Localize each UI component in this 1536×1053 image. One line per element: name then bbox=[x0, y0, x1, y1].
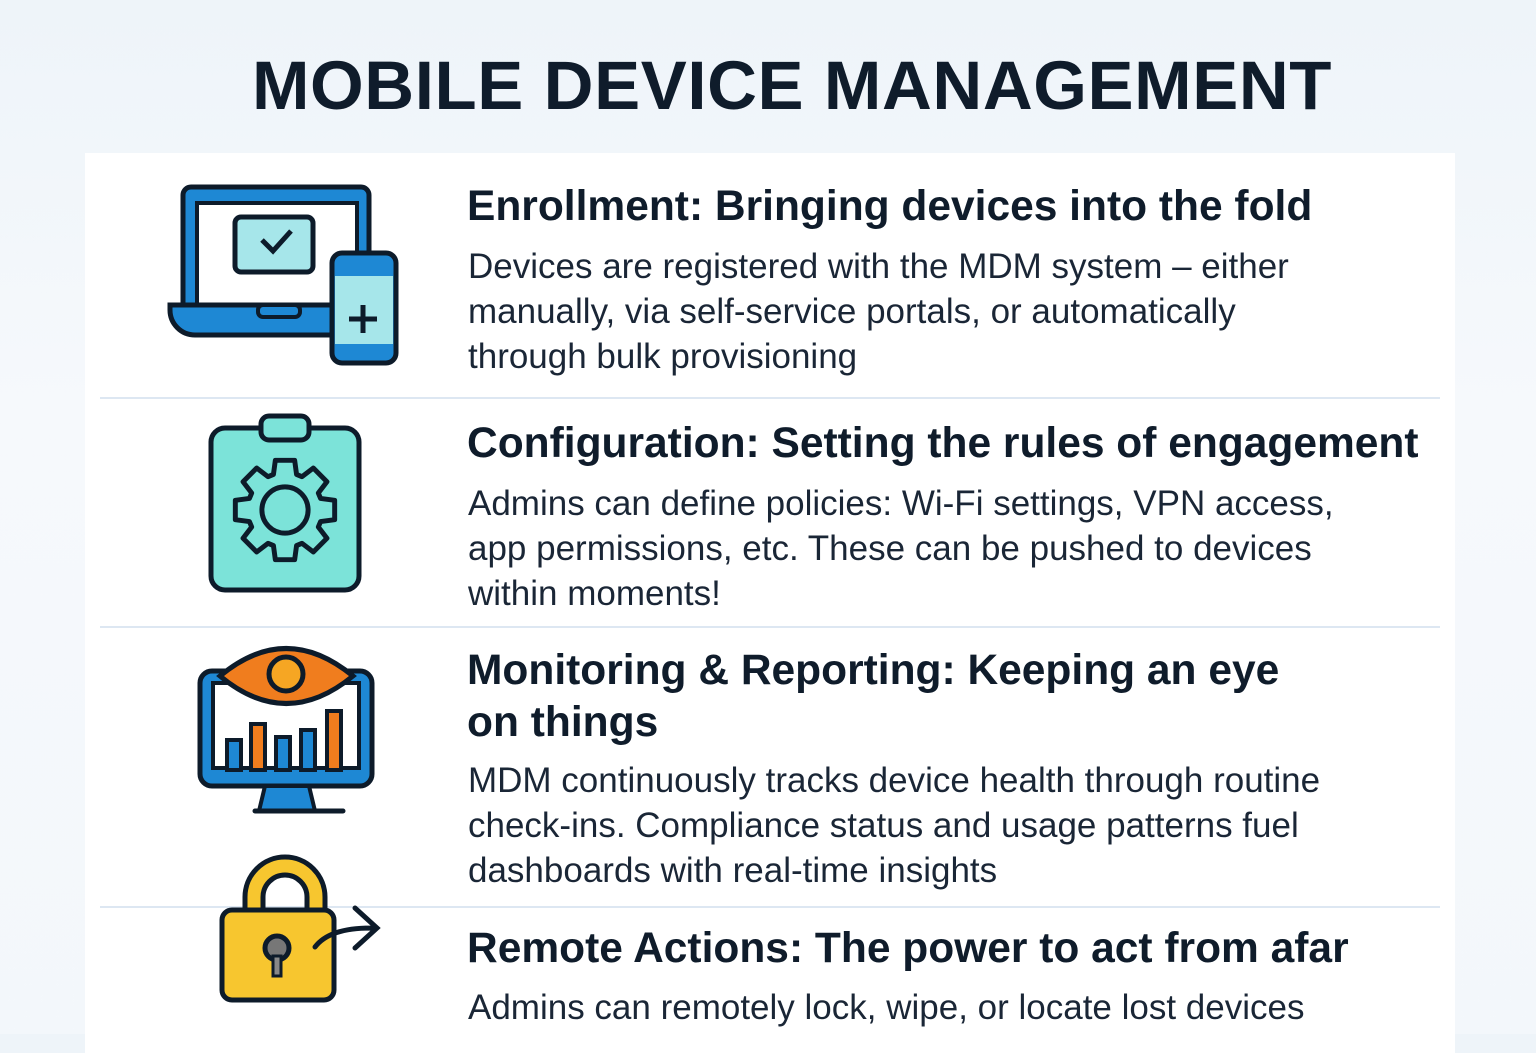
text: monitoring: check-ins. Compliance status and usage patterns fuel bbox=[468, 806, 1299, 845]
text: enrollment: Devices are registered with the MDM system – either bbox=[468, 247, 1289, 286]
heading: monitoring bbox=[467, 647, 1279, 746]
text: configuration: within moments! bbox=[468, 574, 721, 613]
text: enrollment: through bulk provisioning bbox=[468, 337, 857, 376]
icon: clipboard gear bbox=[208, 414, 362, 592]
text: configuration bbox=[468, 484, 1334, 613]
text: configuration: Admins can define policies: Wi-Fi settings, VPN access, bbox=[468, 484, 1334, 523]
icon: laptop and phone bbox=[168, 184, 398, 366]
text: monitoring bbox=[468, 761, 1320, 890]
heading: enrollment: Enrollment: Bringing devices into the fold bbox=[467, 183, 1312, 230]
heading: configuration: Configuration: Setting the rules of engagement bbox=[467, 420, 1419, 467]
text: enrollment: manually, via self-service portals, or automatically bbox=[468, 292, 1236, 331]
icon: monitor eye chart bbox=[198, 646, 374, 814]
text: remote actions: Admins can remotely lock, wipe, or locate lost devices bbox=[468, 988, 1304, 1027]
heading: remote actions: Remote Actions: The power to act from afar bbox=[467, 925, 1349, 972]
text: monitoring: MDM continuously tracks device health through routine bbox=[468, 761, 1320, 800]
text: enrollment bbox=[468, 247, 1289, 376]
title: MOBILE DEVICE MANAGEMENT bbox=[252, 47, 1332, 124]
heading: monitoring: on things bbox=[467, 699, 658, 746]
text: monitoring: dashboards with real-time insights bbox=[468, 851, 997, 890]
heading: monitoring: Monitoring & Reporting: Keeping an eye bbox=[467, 647, 1279, 694]
icon: padlock with arrow bbox=[220, 854, 381, 1002]
text: configuration: app permissions, etc. These can be pushed to devices bbox=[468, 529, 1312, 568]
